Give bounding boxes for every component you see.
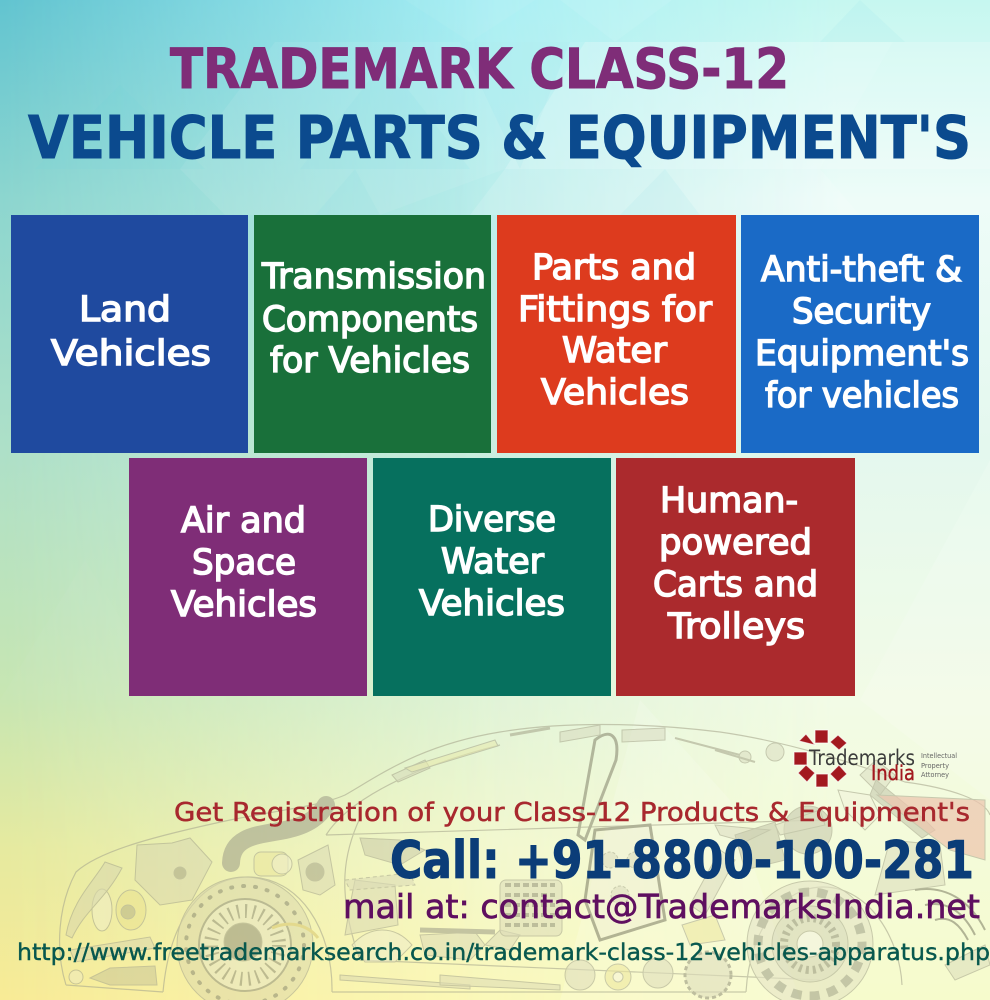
car parts illustration: [60, 724, 990, 1000]
category card: Air and Space: Air and: [181, 501, 306, 541]
air filter: [877, 795, 985, 860]
category card: Anti-theft: [741, 215, 979, 453]
category card: Land Vehicles: Land: [79, 290, 171, 330]
rear parts cluster: [775, 760, 990, 980]
category card: Parts and Fittings: Fittings for: [518, 290, 713, 330]
category card: Transmission Components: Transmission: [261, 257, 486, 297]
category card: Diverse Water: [373, 458, 611, 696]
category card: Anti-theft: for vehicles: [765, 376, 959, 416]
category card: Human-powered: Carts and: [653, 565, 818, 605]
category card: Diverse Water: Vehicles: [419, 584, 565, 624]
rear clutch disc: [747, 881, 873, 1000]
front clutch disc: [177, 877, 318, 1000]
category card: Parts and Fittings: Vehicles: [541, 373, 689, 413]
category card: Anti-theft: Equipment's: [755, 334, 969, 374]
car outline: [60, 724, 990, 992]
category card: Human-powered: Human-: [660, 481, 798, 521]
category card: Anti-theft: Anti-theft &: [761, 250, 962, 290]
category card: Human-powered: Trolleys: [667, 607, 805, 647]
category card: Human-powered: powered: [659, 523, 812, 563]
category card: Anti-theft: Security: [792, 292, 931, 332]
middle parts cluster: [392, 725, 785, 998]
hose: [231, 805, 326, 863]
category card: Land Vehicles: Vehicles: [51, 334, 211, 374]
category card: Transmission Components: [254, 215, 491, 453]
logo tagline: Property: [921, 762, 949, 770]
category card: Parts and Fittings: Water: [562, 331, 668, 371]
title line 1: TRADEMARK CLASS-12: [170, 37, 789, 101]
category card: Parts and Fittings: Parts and: [532, 248, 696, 288]
category card: Land Vehicles: [11, 215, 248, 453]
front parts cluster: [66, 838, 520, 989]
logo: Trademarks India: [794, 730, 957, 787]
logo tagline: [921, 752, 957, 779]
category card: Transmission Components: for Vehicles: [270, 341, 470, 381]
category card: Diverse Water: Water: [441, 542, 545, 582]
logo tagline: Intellectual: [921, 752, 957, 760]
category card: Air and Space: Vehicles: [171, 585, 317, 625]
email: mail at: contact@TrademarksIndia.net: [343, 887, 980, 926]
category card: Parts and Fittings: [497, 215, 736, 453]
category card: Diverse Water: Diverse: [428, 500, 556, 540]
logo tagline: Attorney: [921, 771, 949, 779]
logo: Trademarks India: India: [871, 761, 915, 785]
category card: Air and Space: [129, 458, 367, 696]
website url: http://www.freetrademarksearch.co.in/trademark-class-12-vehicles-apparatus.php: [17, 940, 990, 966]
icon: logo emblem: [794, 730, 847, 787]
logo wordmark: Trademarks: [808, 746, 915, 770]
title: [28, 37, 971, 172]
category card: Human-powered: [616, 458, 855, 696]
category card: Transmission Components: Components: [262, 300, 478, 340]
registration line: Get Registration of your Class-12 Products & Equipment's: [174, 798, 970, 828]
category card: Air and Space: Space: [192, 543, 296, 583]
